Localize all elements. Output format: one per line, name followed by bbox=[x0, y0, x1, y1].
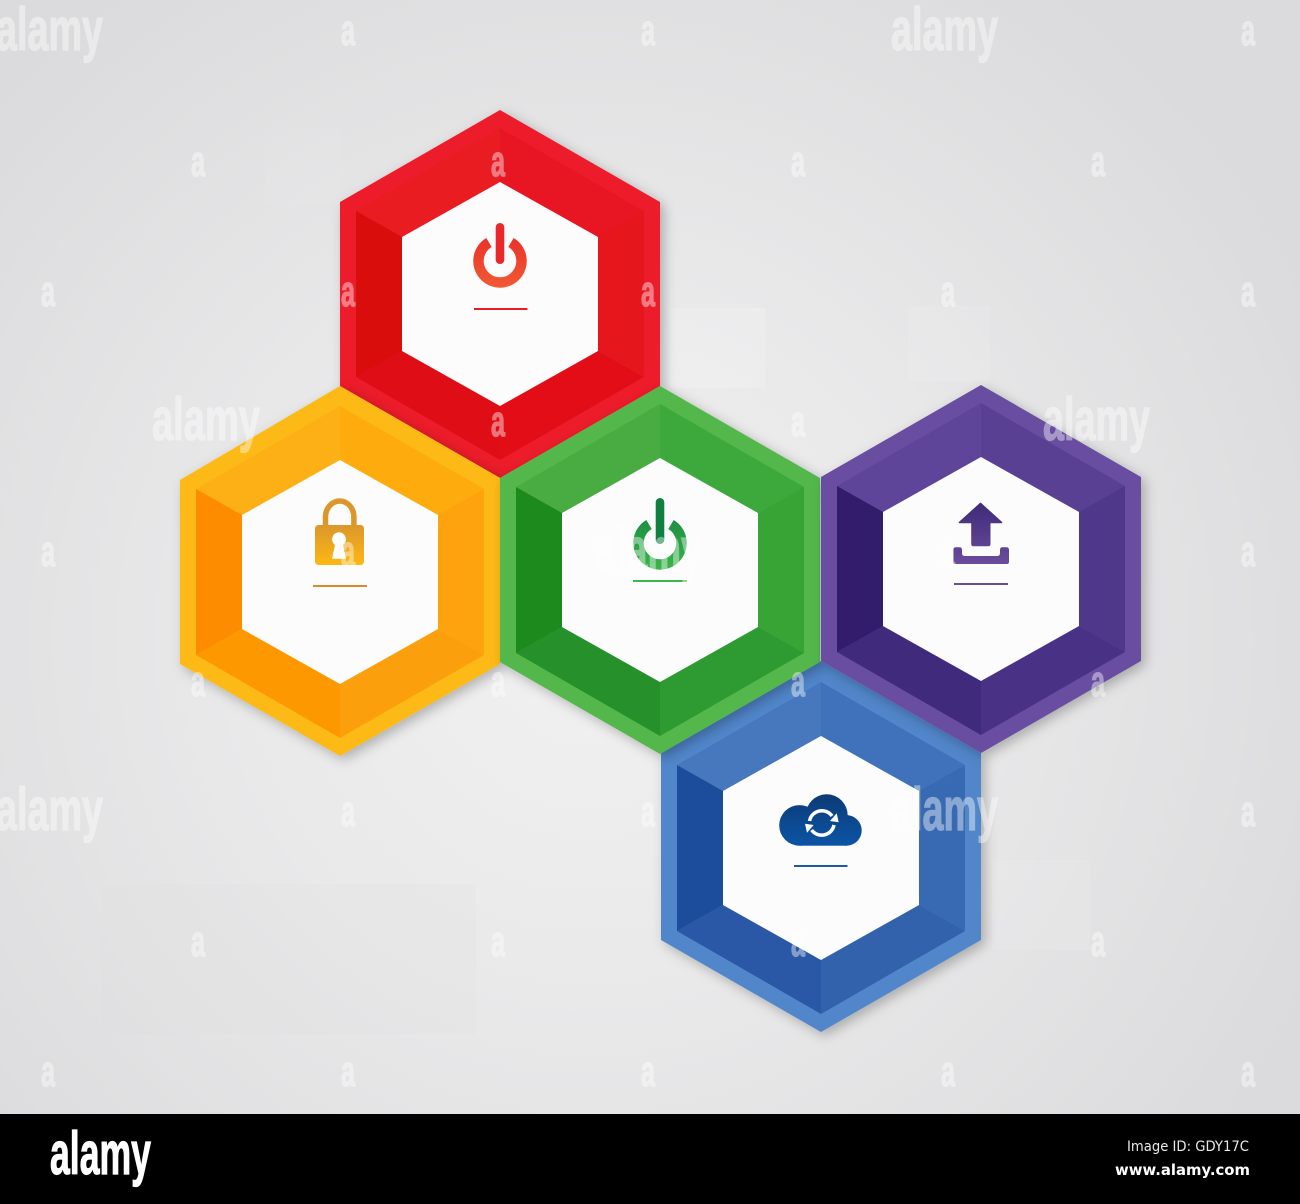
divider: red bbox=[474, 308, 528, 310]
divider: green bbox=[633, 580, 687, 582]
watermark: a bbox=[341, 787, 355, 836]
panel: blue hexagon bbox=[661, 661, 981, 1032]
icon: purple upload bbox=[953, 504, 1009, 564]
icon: green power bbox=[638, 498, 682, 564]
watermark: a bbox=[641, 267, 655, 316]
watermark: a bbox=[1091, 917, 1105, 966]
watermark: a bbox=[1091, 137, 1105, 186]
watermark: a bbox=[191, 917, 205, 966]
watermark: a bbox=[191, 657, 205, 706]
watermark: a bbox=[341, 527, 355, 576]
panel: red hexagon bbox=[340, 110, 660, 478]
watermark: a bbox=[341, 267, 355, 316]
watermark: a bbox=[791, 397, 805, 446]
icon: blue cloud sync bbox=[779, 794, 862, 846]
watermark: a bbox=[491, 397, 505, 446]
panel: yellow hexagon bbox=[180, 386, 500, 756]
watermark: a bbox=[791, 657, 805, 706]
watermark: a bbox=[641, 6, 655, 55]
watermark: a bbox=[941, 267, 955, 316]
panel: green hexagon bbox=[500, 386, 820, 754]
footer bar: Image ID: GDY17C bbox=[1127, 1139, 1249, 1155]
watermark: a bbox=[1241, 527, 1255, 576]
watermark: a bbox=[341, 1047, 355, 1096]
divider: yellow bbox=[313, 585, 367, 587]
icon: red power bbox=[478, 223, 522, 282]
watermark: a bbox=[491, 137, 505, 186]
watermark: a bbox=[641, 787, 655, 836]
watermark: a bbox=[1091, 657, 1105, 706]
watermark: a bbox=[41, 1047, 55, 1096]
watermark: alamy bbox=[595, 516, 702, 583]
watermark: alamy bbox=[891, 776, 998, 843]
watermark: a bbox=[1241, 787, 1255, 836]
watermark: a bbox=[41, 527, 55, 576]
watermark: a bbox=[1241, 1047, 1255, 1096]
divider: blue bbox=[794, 865, 848, 867]
divider: purple bbox=[954, 583, 1008, 585]
watermark: a bbox=[1241, 6, 1255, 55]
watermark: a bbox=[1241, 267, 1255, 316]
watermark: a bbox=[941, 527, 955, 576]
watermark: a bbox=[791, 917, 805, 966]
icon: yellow padlock bbox=[315, 501, 364, 565]
watermark: a bbox=[491, 917, 505, 966]
watermark: alamy bbox=[152, 386, 260, 453]
watermark: alamy bbox=[0, 776, 103, 843]
watermark: a bbox=[41, 267, 55, 316]
footer bar: alamy bbox=[50, 1120, 151, 1187]
watermark: a bbox=[941, 1047, 955, 1096]
watermark: a bbox=[491, 657, 505, 706]
watermark: a bbox=[191, 137, 205, 186]
footer bar: www.alamy.com bbox=[1115, 1161, 1250, 1179]
watermark: a bbox=[791, 137, 805, 186]
panel: purple hexagon bbox=[821, 385, 1141, 753]
watermark: a bbox=[341, 6, 355, 55]
watermark: alamy bbox=[1043, 386, 1150, 453]
footer bar bbox=[0, 1114, 1300, 1204]
watermark: a bbox=[641, 1047, 655, 1096]
